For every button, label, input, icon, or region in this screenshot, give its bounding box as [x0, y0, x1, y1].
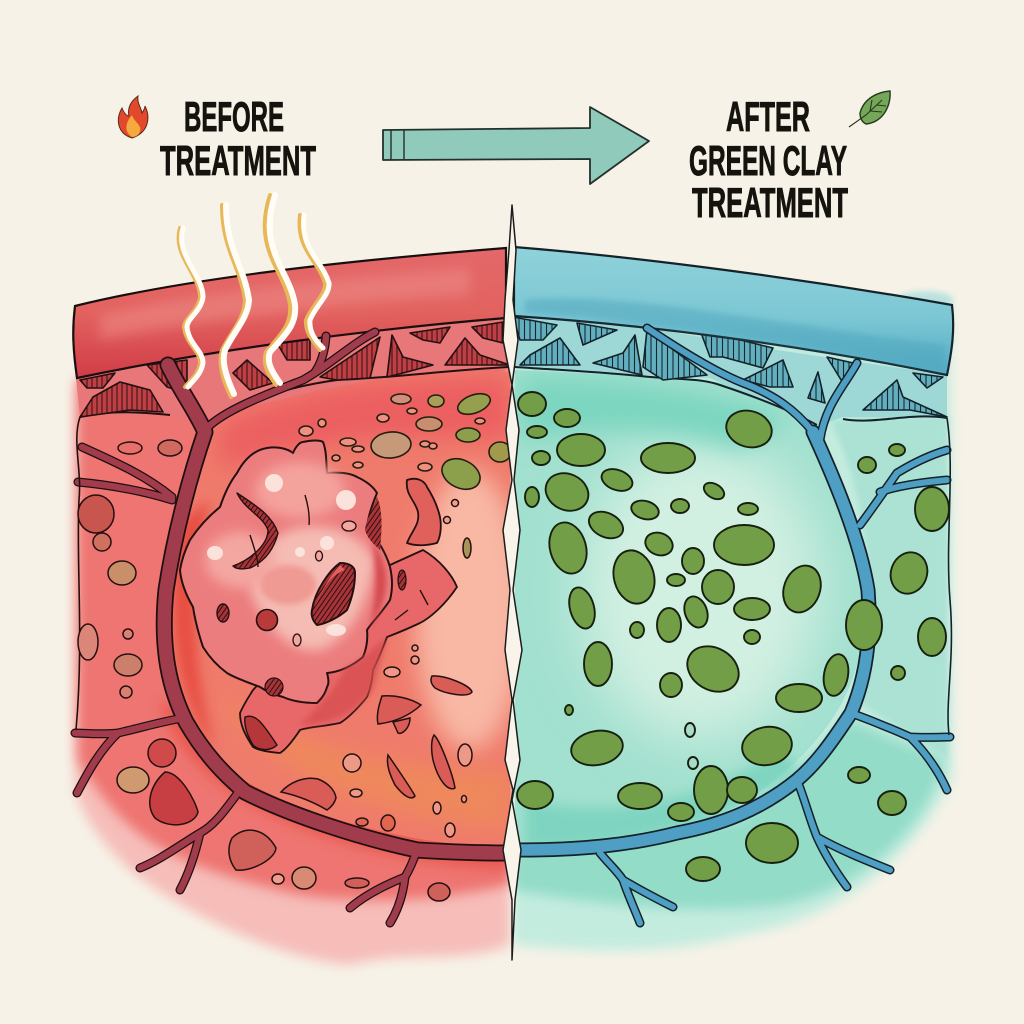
band bleed	[897, 291, 953, 309]
outer tissue edge	[947, 418, 951, 735]
mass upper flap	[407, 479, 441, 545]
icon: flame	[118, 96, 148, 138]
vein outlines	[520, 328, 950, 923]
green clay particles entering	[299, 390, 511, 495]
mass dark lower edge	[300, 637, 387, 725]
stratum band	[514, 247, 953, 375]
pale outer teal wash	[512, 300, 952, 951]
wound pale right	[415, 470, 525, 750]
arrow: before to after	[383, 107, 649, 184]
lower ring tint	[525, 750, 800, 848]
epidermis	[76, 318, 510, 425]
pale outer wash	[75, 330, 510, 965]
mass under-lobe	[240, 550, 457, 753]
white spots	[207, 474, 356, 636]
heading: after green clay treatment: GREEN CLAY	[689, 137, 847, 184]
vein fill	[75, 332, 505, 923]
panel: calm skin after green clay	[512, 247, 953, 951]
outer tissue edge	[76, 417, 80, 730]
heading: before treatment	[160, 93, 316, 184]
green clay particles	[517, 392, 949, 881]
healed area highlight	[580, 440, 820, 740]
wound upper red	[220, 378, 510, 470]
icon: leaf	[849, 91, 890, 127]
mass crater	[312, 563, 355, 625]
heading: after green clay treatment: TREATMENT	[692, 179, 848, 226]
veins	[520, 328, 950, 923]
heading: after green clay treatment	[689, 93, 848, 226]
hatched fold	[233, 493, 278, 569]
epidermis lower outline	[80, 367, 510, 417]
vein fill	[520, 328, 950, 923]
veins	[75, 332, 505, 923]
mass main body	[180, 440, 392, 703]
heat waves	[179, 195, 329, 397]
heading: after green clay treatment: AFTER	[726, 93, 810, 140]
wound region	[166, 372, 510, 848]
saturated outer teal	[512, 720, 945, 909]
central torn paper divider	[503, 205, 522, 960]
mass centre blotch	[260, 565, 316, 605]
band lighter streak	[100, 268, 470, 340]
debris	[281, 500, 472, 837]
wound orange lower	[270, 734, 512, 828]
hatched right edge	[365, 497, 382, 550]
mass mottling	[250, 526, 375, 651]
hatched dermal folds	[513, 317, 947, 417]
saturated tissue	[78, 330, 510, 900]
epidermis	[513, 316, 947, 425]
top teal tint	[520, 375, 790, 450]
hatched dermal folds	[80, 322, 510, 417]
mass pink wash	[205, 532, 275, 588]
large inflamed mass	[180, 440, 457, 753]
heading: before treatment: BEFORE	[184, 93, 284, 140]
red rim outside ring	[160, 700, 510, 870]
panel: inflamed skin before treatment	[73, 248, 525, 965]
epidermis lower outline	[515, 367, 947, 425]
healed area	[515, 370, 865, 848]
cells outside wound	[78, 440, 450, 901]
mass fine lines	[250, 495, 428, 620]
mass upper wash	[255, 462, 345, 518]
right outer tissue	[830, 415, 948, 760]
wound red edge near ring	[173, 500, 215, 750]
stratum band	[73, 248, 506, 378]
heading: before treatment: TREATMENT	[160, 137, 316, 184]
band darker streak	[525, 298, 945, 372]
mass dark right rim	[370, 540, 386, 628]
vein outlines	[75, 332, 505, 923]
